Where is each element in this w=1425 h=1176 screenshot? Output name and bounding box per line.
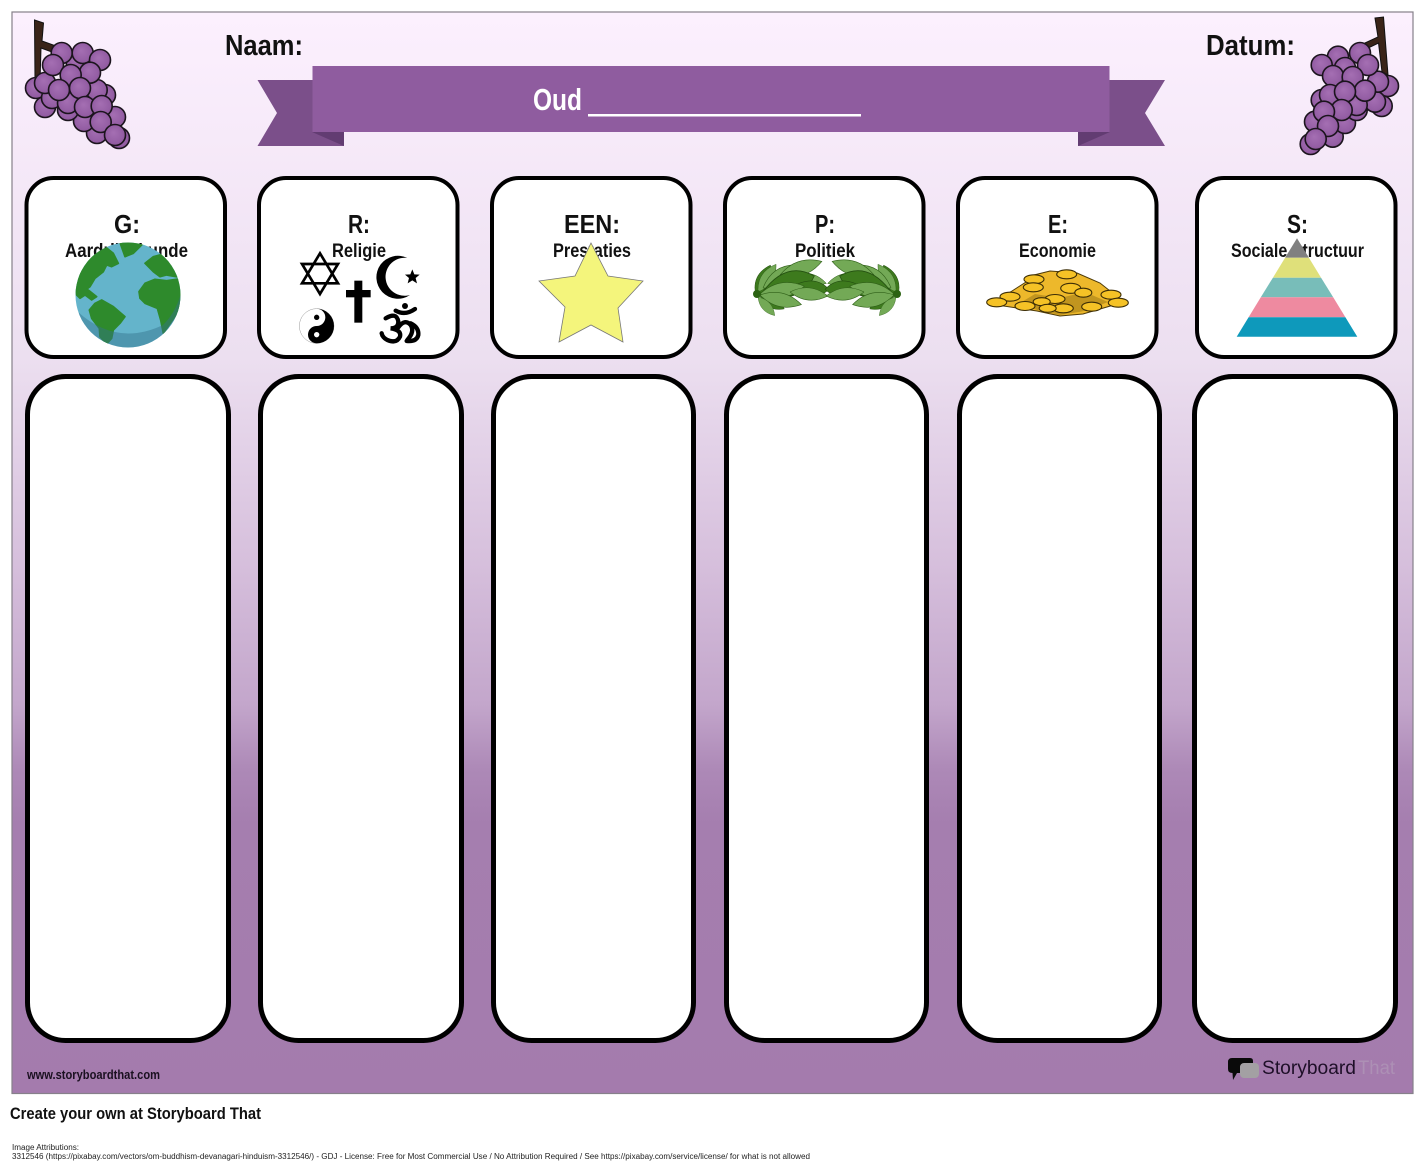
icon: globe [76, 242, 180, 348]
icon: star [539, 243, 643, 342]
letter E: E: [1048, 209, 1068, 239]
letter G: G: [114, 209, 140, 239]
title underline [588, 114, 861, 116]
icon: grapes left [26, 20, 130, 148]
label religion: Religie [332, 240, 386, 262]
label politics: Politiek [795, 240, 855, 262]
call to action: Create your own at Storyboard That [10, 1105, 261, 1123]
title text: Oud [533, 82, 582, 117]
letter R: R: [348, 209, 370, 239]
answer column 5 [960, 376, 1160, 1040]
icon: religious symbols [299, 253, 420, 343]
panel: achievements header [492, 178, 690, 357]
letter EEN: EEN: [564, 209, 620, 239]
answer column 3 [494, 376, 694, 1040]
answer column 4 [726, 376, 926, 1040]
letter S: S: [1287, 209, 1308, 239]
title banner [258, 66, 1165, 146]
icon: laurel wreath [750, 255, 904, 319]
label social structure: Sociale Structuur [1231, 240, 1364, 262]
logo: Storyboard That: That [1358, 1058, 1396, 1079]
image attributions: 3312546 (https://pixabay.com/vectors/om-buddhism-devanagari-hinduism-3312546/) - GDJ - License: Free for Most Commercial Use / No Attribution Required / See https://pixabay.com/service/license/ for what is not allowed [12, 1152, 810, 1161]
icon: pile of coins [987, 270, 1128, 316]
icon: grapes right [1300, 17, 1398, 154]
letter P: P: [815, 209, 835, 239]
panel: social structure header [1197, 178, 1396, 357]
panel: politics header [725, 178, 924, 357]
label: Naam: Naam: [225, 30, 303, 62]
label: Datum: Datum: [1206, 30, 1295, 62]
label geography: Aardrijkskunde [65, 240, 188, 262]
icon: social pyramid [1237, 238, 1357, 337]
logo: Storyboard That [1228, 1058, 1396, 1080]
panel: geography header [26, 178, 225, 357]
label economy: Economie [1019, 240, 1096, 262]
answer column 6 [1194, 376, 1396, 1040]
image attributions: Image Attributions: [12, 1143, 79, 1152]
label achievements: Prestaties [553, 240, 631, 262]
panel: religion header [259, 178, 458, 357]
website url: www.storyboardthat.com [26, 1067, 160, 1082]
answer column 2 [260, 376, 462, 1040]
answer column 1 [28, 376, 228, 1040]
panel: economy header [958, 178, 1156, 357]
image attributions [12, 1143, 810, 1161]
logo: Storyboard That: Storyboard [1262, 1058, 1356, 1079]
